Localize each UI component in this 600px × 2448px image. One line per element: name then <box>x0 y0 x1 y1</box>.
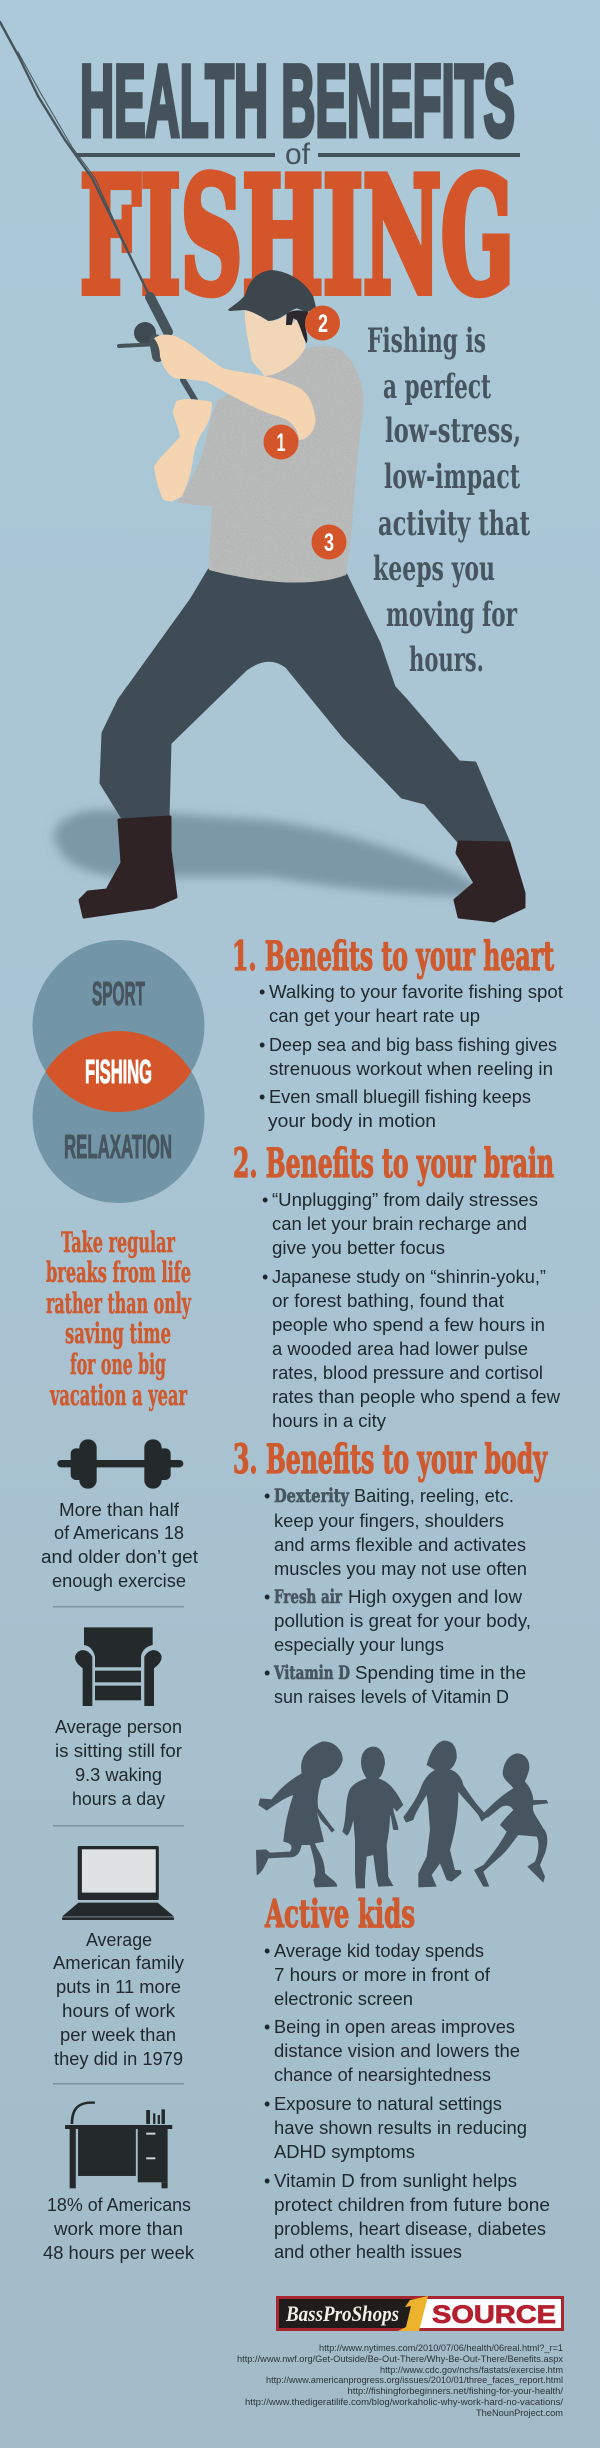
text: exercise stat: and older don’t get <box>41 1547 198 1567</box>
raised forearm and hand <box>154 335 316 440</box>
badge 3: 3 <box>324 529 334 557</box>
list: brain benefits: give you better focus <box>272 1238 445 1258</box>
list: heart benefits <box>259 982 563 1131</box>
child 4 <box>474 1753 548 1887</box>
circle: relaxation <box>32 1031 204 1203</box>
list: active kids: chance of nearsightedness <box>274 2065 491 2085</box>
logo: Bass Pro Shops 1 Source: SOURCE <box>432 2301 556 2329</box>
badge 3 <box>312 524 346 560</box>
source links: http://fishingforbeginners.net/fishing-for-your-health/ <box>348 2386 563 2397</box>
title divider with "of" <box>76 138 520 171</box>
intro statement: low-stress, <box>385 411 521 451</box>
list: active kids: • <box>264 2094 270 2114</box>
list: heart benefits: Walking to your favorite fishing spot <box>269 982 563 1002</box>
list: brain benefits: people who spend a few hours in <box>272 1315 545 1335</box>
badge 2: 2 <box>318 310 328 338</box>
shirt <box>177 346 364 583</box>
text: exercise stat: of Americans 18 <box>54 1523 184 1543</box>
list: heart benefits: • <box>259 1035 265 1055</box>
badge 1: 1 <box>276 429 286 457</box>
text: long work weeks stat <box>43 2195 195 2263</box>
upper body <box>154 270 364 583</box>
text: work hours stat: hours of work <box>62 2001 176 2021</box>
list: active kids: ADHD symptoms <box>274 2142 415 2162</box>
text: work hours stat: American family <box>53 1953 184 1973</box>
intro statement: a perfect <box>383 367 491 407</box>
icon: laptop <box>62 1846 174 1920</box>
venn diagram: SPORT <box>92 975 145 1012</box>
list: active kids: protect children from future bone <box>274 2195 550 2215</box>
right boot <box>455 842 524 921</box>
list: active kids: Vitamin D from sunlight helps <box>274 2171 517 2191</box>
child 2 <box>342 1747 403 1888</box>
heading: active kids: Active kids <box>264 1891 415 1936</box>
list: heart benefits: Deep sea and big bass fishing gives <box>269 1035 557 1055</box>
list: brain benefits: can let your brain recharge and <box>272 1214 527 1234</box>
list: body benefits: High oxygen and low <box>348 1587 523 1607</box>
intro statement: keeps you <box>373 549 495 589</box>
text: work hours stat: they did in 1979 <box>54 2049 183 2069</box>
callout: take regular breaks: breaks from life <box>46 1256 191 1289</box>
callout: take regular breaks <box>46 1226 192 1412</box>
list: body benefits: Dexterity <box>274 1485 350 1507</box>
text: long work weeks stat: 48 hours per week <box>43 2243 195 2263</box>
child 1 <box>256 1741 343 1887</box>
list: active kids: Average kid today spends <box>274 1941 484 1961</box>
label: relaxation: RELAXATION <box>64 1128 172 1165</box>
list: body benefits: especially your lungs <box>274 1635 444 1655</box>
list: active kids: problems, heart disease, diabetes <box>274 2219 546 2239</box>
list: active kids: Exposure to natural settings <box>274 2094 502 2114</box>
list: heart benefits: your body in motion <box>268 1111 436 1131</box>
title divider with "of": of <box>285 138 311 171</box>
list: body benefits: • <box>264 1663 270 1683</box>
circle: sport <box>32 940 204 1112</box>
list: body benefits: keep your fingers, shoulders <box>274 1511 504 1531</box>
text: long work weeks stat: 18% of Americans <box>47 2195 191 2215</box>
text: sitting stat: Average person <box>55 1717 182 1737</box>
list: body benefits: and arms flexible and activates <box>274 1535 526 1555</box>
text: long work weeks stat: work more than <box>53 2219 183 2239</box>
list: heart benefits: • <box>259 1087 265 1107</box>
callout: take regular breaks: for one big <box>70 1348 166 1381</box>
child 3 <box>403 1741 487 1887</box>
list: brain benefits: Japanese study on “shinrin-yoku,” <box>272 1267 546 1287</box>
source links: http://www.nytimes.com/2010/07/06/health/06real.html?_r=1 <box>319 2343 563 2354</box>
fisherman <box>80 270 524 921</box>
intro statement: Fishing is <box>367 321 486 361</box>
source links: http://www.nwf.org/Get-Outside/Be-Out-There/Why-Be-Out-There/Benefits.aspx <box>237 2354 563 2365</box>
source links: TheNounProject.com <box>476 2408 563 2419</box>
left boot <box>80 817 176 917</box>
overlap: fishing <box>46 1031 192 1112</box>
list: body benefits: muscles you may not use often <box>274 1559 527 1579</box>
text: sitting stat: is sitting still for <box>55 1741 182 1761</box>
list: brain benefits: or forest bathing, found that <box>272 1291 504 1311</box>
list: heart benefits: strenuous workout when reeling in <box>269 1059 553 1079</box>
badge 2 <box>305 306 340 340</box>
list: active kids <box>264 1941 550 2262</box>
text: sitting stat: 9.3 waking <box>75 1765 162 1785</box>
list: brain benefits: “Unplugging” from daily stresses <box>272 1190 538 1210</box>
label: fishing: FISHING <box>85 1053 152 1090</box>
venn diagram <box>32 940 204 1203</box>
text: work hours stat: per week than <box>60 2025 176 2045</box>
list: body benefits: Vitamin D <box>273 1662 350 1684</box>
text: work hours stat <box>53 1930 184 2069</box>
list: heart benefits: Even small bluegill fishing keeps <box>269 1087 531 1107</box>
callout: take regular breaks: vacation a year <box>49 1379 187 1412</box>
silhouette: children holding hands <box>256 1741 548 1888</box>
list: active kids: 7 hours or more in front of <box>274 1965 491 1985</box>
text: exercise stat: enough exercise <box>52 1571 186 1591</box>
list: active kids: • <box>264 1941 270 1961</box>
list: active kids: electronic screen <box>274 1989 413 2009</box>
list: active kids: • <box>264 2171 270 2191</box>
list: active kids: have shown results in reducing <box>274 2118 527 2138</box>
source links <box>237 2343 563 2419</box>
source links: http://www.thedigeratilife.com/blog/workaholic-why-work-hard-no-vacations/ <box>245 2397 563 2408</box>
list: body benefits: sun raises levels of Vitamin D <box>274 1687 509 1707</box>
logo: Bass Pro Shops 1 Source: BassProShops <box>285 2301 399 2326</box>
list: body benefits: pollution is great for your body, <box>274 1611 531 1631</box>
pants <box>101 570 509 843</box>
text: sitting stat <box>55 1717 182 1809</box>
source links: http://www.americanprogress.org/issues/2010/01/three_faces_report.html <box>266 2375 563 2386</box>
badge 1 <box>264 424 298 460</box>
logo: Bass Pro Shops 1 Source <box>276 2296 564 2331</box>
intro statement: hours. <box>409 640 484 680</box>
intro statement: activity that <box>378 504 530 544</box>
callout: take regular breaks: rather than only <box>46 1287 192 1320</box>
list: body benefits <box>264 1485 531 1707</box>
face and neck <box>245 310 306 376</box>
callout: take regular breaks: Take regular <box>61 1226 175 1259</box>
list: brain benefits <box>262 1190 561 1431</box>
source links: http://www.cdc.gov/nchs/fastats/exercise.htm <box>380 2365 563 2376</box>
list: body benefits: • <box>264 1486 270 1506</box>
ground shadow <box>54 810 494 897</box>
icon: armchair <box>75 1627 162 1706</box>
list: body benefits: Fresh air <box>274 1586 343 1608</box>
fishing rod <box>0 22 195 400</box>
list: brain benefits: hours in a city <box>272 1411 386 1431</box>
intro statement: low-impact <box>384 457 520 497</box>
list: body benefits: • <box>264 1587 270 1607</box>
list: brain benefits: a wooded area had lower pulse <box>272 1339 528 1359</box>
list: active kids: Being in open areas improves <box>274 2017 515 2037</box>
intro statement: moving for <box>386 595 518 635</box>
hair <box>286 310 308 343</box>
fishing reel <box>119 322 158 356</box>
cap <box>228 270 317 321</box>
list: brain benefits: • <box>262 1190 268 1210</box>
text: work hours stat: puts in 11 more <box>56 1977 181 1997</box>
text: work hours stat: Average <box>86 1930 152 1950</box>
list: heart benefits: can get your heart rate up <box>269 1006 480 1026</box>
text: exercise stat: More than half <box>59 1500 180 1520</box>
list: brain benefits: rates than people who spend a few <box>272 1387 561 1407</box>
list: body benefits: Spending time in the <box>355 1663 526 1683</box>
callout: take regular breaks: saving time <box>65 1317 171 1350</box>
list: heart benefits: • <box>259 982 265 1002</box>
list: active kids: • <box>264 2017 270 2037</box>
text: exercise stat <box>41 1500 198 1591</box>
list: brain benefits: • <box>262 1267 268 1287</box>
list: brain benefits: rates, blood pressure and cortisol <box>272 1363 543 1383</box>
icon: dumbbell <box>57 1439 183 1489</box>
list: body benefits: Baiting, reeling, etc. <box>354 1486 514 1506</box>
icon: desk <box>65 2103 172 2188</box>
list: active kids: and other health issues <box>274 2242 462 2262</box>
list: active kids: distance vision and lowers the <box>274 2041 520 2061</box>
title <box>76 44 520 330</box>
intro statement <box>367 321 530 680</box>
lower fist and forearm <box>154 399 212 502</box>
text: sitting stat: hours a day <box>72 1789 165 1809</box>
